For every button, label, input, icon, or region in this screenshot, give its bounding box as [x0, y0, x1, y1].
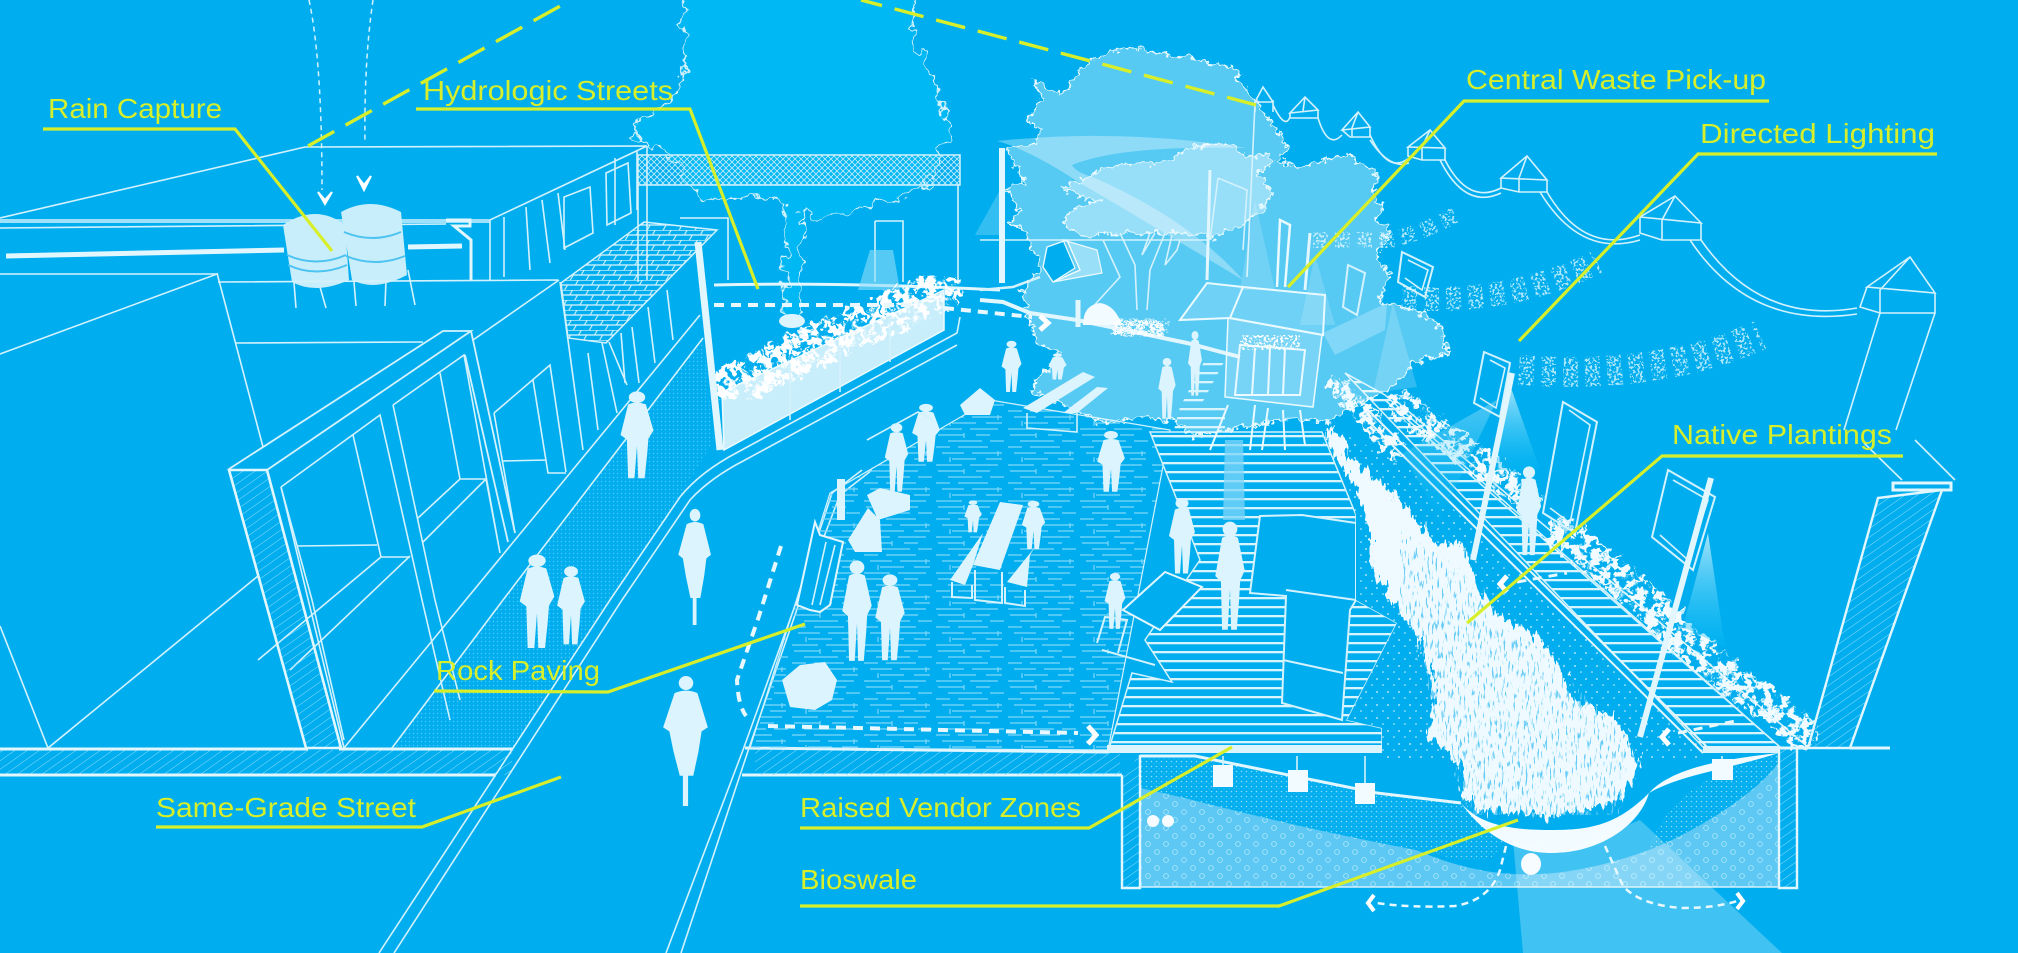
label: Rock Paving: [434, 624, 805, 692]
label: Central Waste Pick-up: [1288, 64, 1769, 287]
person: table pair: [964, 500, 982, 532]
right boardwalk stripes: [1345, 373, 1808, 753]
label: Same-Grade Street: Same-Grade Street: [156, 792, 416, 823]
bioswale ground: [1330, 425, 1703, 760]
trunks, masts and light cones under canopy: [975, 103, 1417, 393]
label: Hydrologic Streets: [416, 75, 758, 289]
label: Native Plantings: [1467, 419, 1903, 623]
vendor kiosk: [1170, 283, 1325, 450]
rear picnic table: [1023, 372, 1095, 413]
hanging drain lamps: [1213, 756, 1733, 804]
people: [520, 331, 1541, 806]
picnic table: [973, 502, 1023, 570]
border plants: [1340, 385, 1803, 733]
label: Hydrologic Streets: Hydrologic Streets: [423, 75, 673, 106]
person: kiosk queue: [1188, 331, 1202, 396]
right street-side windows: [1398, 252, 1715, 570]
vendor deck stripes: [1107, 432, 1397, 753]
infiltration arrows: [1368, 846, 1743, 911]
label: Rain Capture: Rain Capture: [48, 93, 222, 124]
water drops: [1147, 815, 1541, 875]
label: Raised Vendor Zones: [800, 747, 1232, 828]
vendor table: [1123, 572, 1202, 630]
light strip beam: [1223, 440, 1245, 520]
person: boardwalk walker: [1517, 466, 1541, 555]
back tree outline: [631, 0, 950, 322]
dashed rain paths: [309, 0, 373, 190]
rain barrels: [283, 176, 415, 308]
label: Directed Lighting: Directed Lighting: [1700, 118, 1935, 149]
sidewalk strip: [392, 338, 714, 748]
person: bench group: [885, 423, 908, 492]
person: wheelchair user: [621, 391, 653, 478]
rocks: [782, 388, 995, 710]
white curved path: [980, 277, 1240, 357]
label: Central Waste Pick-up: Central Waste Pick-up: [1466, 64, 1766, 95]
light sweep: [997, 136, 1247, 280]
rock paving plaza: [750, 400, 1170, 750]
bench left: [797, 522, 843, 612]
dashed flow paths: [714, 305, 1740, 745]
person: plaza couple: [842, 561, 872, 661]
lamp poles and light cones: [1403, 373, 1725, 737]
back building with tiled roof: [638, 155, 1000, 328]
canopy posts and catenary wires: [1255, 87, 1955, 748]
person: vendor customers: [1169, 498, 1195, 573]
person: plaza walker: [1097, 431, 1125, 492]
light tree canopies: [997, 47, 1450, 437]
kiosk roof: [1180, 283, 1325, 335]
label: Same-Grade Street: [156, 777, 561, 827]
street edge lines: [344, 315, 960, 953]
planter with plants: [698, 242, 944, 450]
dashed sightline right: [861, 0, 1256, 105]
label: Rain Capture: [43, 93, 332, 251]
label: Bioswale: Bioswale: [800, 864, 917, 895]
label: Rock Paving: Rock Paving: [436, 655, 600, 686]
cyclist: front: [663, 676, 708, 806]
bunting strings: [1313, 212, 1760, 372]
section through bioswale: [1122, 748, 1797, 953]
label: Directed Lighting: [1519, 118, 1937, 341]
kiosk body: [1225, 318, 1322, 407]
person: pedestrian couple: [520, 554, 554, 648]
tile awning: [561, 222, 717, 343]
dashed sightline left: [308, 0, 571, 146]
front-left building: [0, 273, 1122, 775]
rear canopy: [1005, 47, 1450, 437]
native plantings mass: [1327, 420, 1640, 817]
vendor panels: [1250, 515, 1356, 720]
label: Raised Vendor Zones: Raised Vendor Zones: [800, 792, 1081, 823]
rooftop building A: [0, 146, 647, 280]
cyclist: rear: [678, 509, 711, 625]
label: Native Plantings: Native Plantings: [1672, 419, 1892, 450]
front canopy: [1063, 142, 1273, 237]
label: Bioswale: [800, 820, 1518, 906]
benches and tables: [797, 372, 1202, 665]
